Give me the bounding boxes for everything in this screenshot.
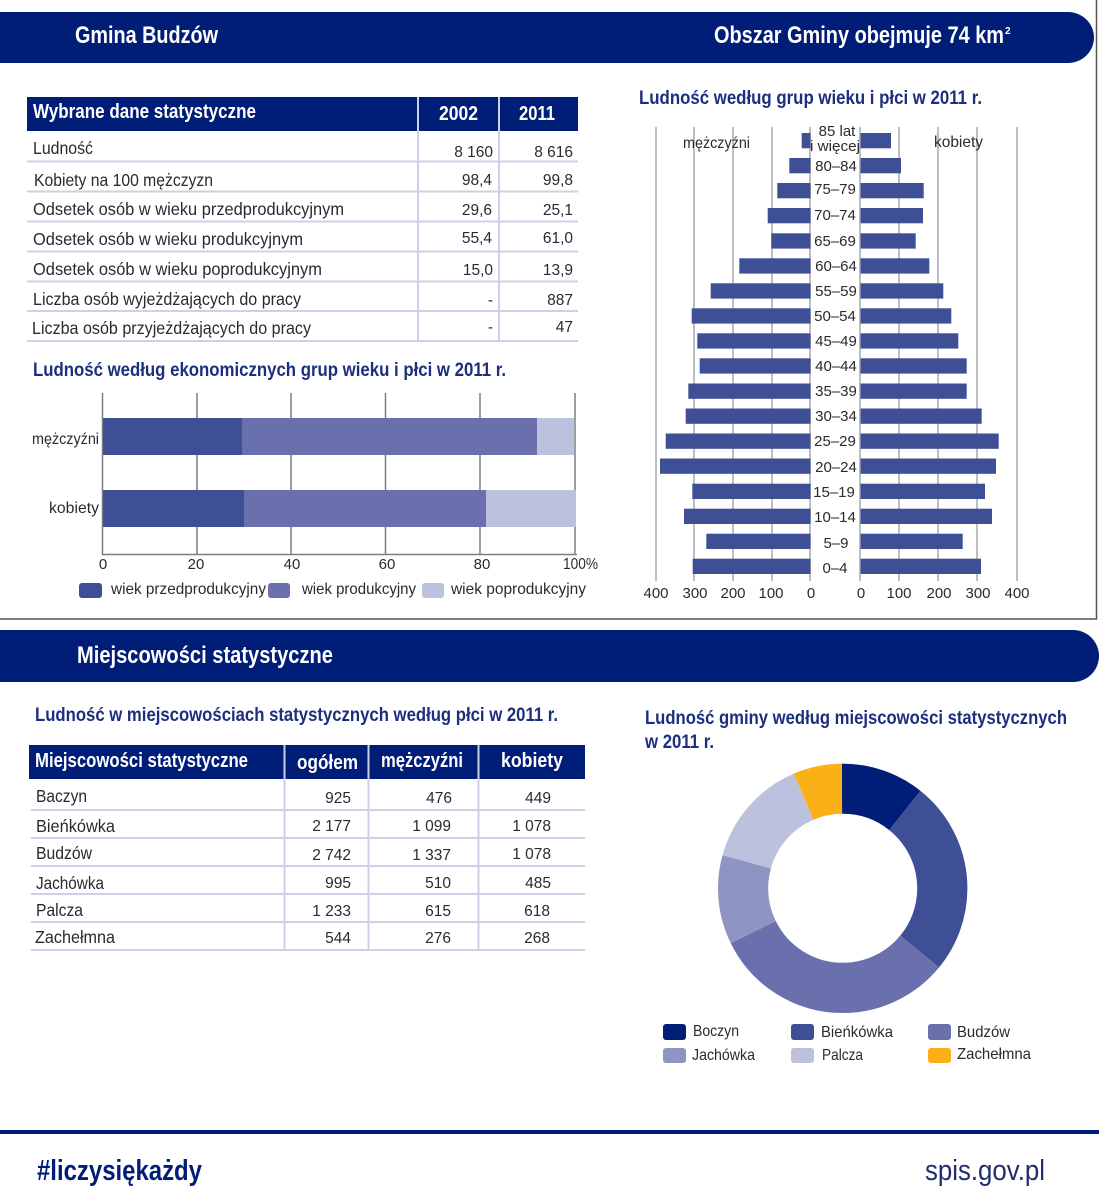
table: Miejscowości statystyczne: Zachełmna: [35, 927, 115, 947]
axis tick labels: [643, 585, 1030, 602]
axis tick labels: 400: [643, 585, 669, 602]
table: Miejscowości statystyczne: 449: [525, 790, 551, 807]
table: Miejscowości statystyczne: 1 078: [512, 818, 551, 835]
table: Wybrane dane statystyczne: 47: [556, 319, 573, 336]
legend: economic age groups: wiek produkcyjny: [301, 581, 416, 598]
stacked bar chart: economic age groups: 80: [474, 556, 490, 573]
header banner: Gmina Budzów: 2: [1005, 26, 1011, 37]
table: Wybrane dane statystyczne: [27, 97, 578, 341]
age labels: 65–69: [814, 233, 856, 250]
age labels: 75–79: [814, 181, 856, 198]
age labels: 10–14: [814, 509, 856, 526]
axis tick labels: 200: [926, 585, 952, 602]
table: Wybrane dane statystyczne: Liczba osób wyjeżdżających do pracy: [33, 289, 301, 309]
table: Wybrane dane statystyczne: 2002: [439, 103, 478, 125]
table: Wybrane dane statystyczne: 15,0: [463, 262, 493, 279]
axis tick labels: 200: [720, 585, 746, 602]
stacked bar chart: economic age groups: 100%: [563, 556, 598, 573]
table: Miejscowości statystyczne: 1 078: [512, 846, 551, 863]
population pyramid chart: [643, 123, 1030, 602]
heading: population pyramid: Ludność według grup wieku i płci w 2011 r.: [639, 88, 982, 109]
age labels: 5–9: [823, 535, 849, 552]
age labels: 30–34: [815, 408, 857, 425]
bar: mężczyźni: [103, 418, 574, 455]
table: Miejscowości statystyczne: 485: [525, 875, 551, 892]
age labels: 50–54: [814, 308, 856, 325]
table: Miejscowości statystyczne: ogółem: [297, 752, 358, 774]
legend: donut chart: Zachełmna: [957, 1046, 1031, 1063]
age labels: 70–74: [814, 207, 856, 224]
table: Miejscowości statystyczne: 1 099: [412, 818, 451, 835]
stacked bar chart: economic age groups: 40: [284, 556, 300, 573]
table: Miejscowości statystyczne: kobiety: [501, 750, 564, 772]
header banner: Gmina Budzów: Obszar Gminy obejmuje 74 km: [714, 22, 1004, 49]
table: Wybrane dane statystyczne: 13,9: [543, 262, 573, 279]
age labels: 80–84: [815, 158, 857, 175]
legend: donut chart: Bieńkówka: [821, 1024, 893, 1041]
axis tick labels: 300: [965, 585, 991, 602]
donut chart: population by locality: [743, 789, 942, 988]
table: Wybrane dane statystyczne: 55,4: [462, 230, 492, 247]
age labels: [810, 123, 860, 578]
stacked bar chart: economic age groups: 60: [379, 556, 395, 573]
table: Miejscowości statystyczne: Jachówka: [36, 873, 104, 893]
heading: economic age groups: Ludność według ekonomicznych grup wieku i płci w 2011 r.: [33, 360, 506, 381]
table: Wybrane dane statystyczne: -: [488, 292, 493, 309]
stacked bar chart: economic age groups: kobiety: [49, 500, 99, 517]
legend: donut chart: [663, 1023, 1031, 1064]
table: Miejscowości statystyczne: 268: [524, 930, 550, 947]
bars: kobiety: [860, 133, 999, 574]
table: Wybrane dane statystyczne: 61,0: [543, 230, 573, 247]
header banner: Miejscowości statystyczne: Miejscowości statystyczne: [77, 642, 333, 669]
table: Wybrane dane statystyczne: Odsetek osób w wieku poprodukcyjnym: [33, 259, 322, 279]
legend: economic age groups: wiek poprodukcyjny: [450, 581, 586, 598]
table: Miejscowości statystyczne: 1 337: [412, 847, 451, 864]
table: Miejscowości statystyczne: 995: [325, 875, 351, 892]
age labels: 20–24: [815, 459, 857, 476]
table: Wybrane dane statystyczne: 887: [547, 292, 573, 309]
stacked bar chart: economic age groups: [32, 393, 598, 573]
age labels: 35–39: [815, 383, 857, 400]
stacked bar chart: economic age groups: 20: [188, 556, 204, 573]
table: Wybrane dane statystyczne: 8 616: [534, 144, 573, 161]
header banner: Miejscowości statystyczne: [0, 630, 1099, 682]
axis tick labels: 100: [758, 585, 784, 602]
table: Miejscowości statystyczne: Bieńkówka: [36, 816, 115, 836]
age labels: 0–4: [822, 560, 848, 577]
heading: localities table: Ludność w miejscowościach statystycznych według płci w 2011 r.: [35, 705, 558, 726]
table: Miejscowości statystyczne: 510: [425, 875, 451, 892]
axis tick labels: 400: [1004, 585, 1030, 602]
table: Miejscowości statystyczne: 544: [325, 930, 351, 947]
header banner: Gmina Budzów: [0, 12, 1094, 63]
table: Wybrane dane statystyczne: Odsetek osób w wieku produkcyjnym: [33, 229, 303, 249]
frame of top section: [0, 0, 1096, 619]
table: Wybrane dane statystyczne: 29,6: [462, 202, 492, 219]
footer hashtag: #liczysiękażdy: [37, 1155, 202, 1187]
footer rule: [0, 1130, 1099, 1134]
table: Wybrane dane statystyczne: Kobiety na 100 mężczyzn: [34, 170, 213, 190]
heading: donut chart: w 2011 r.: [644, 732, 714, 753]
table: Miejscowości statystyczne: Palcza: [36, 900, 83, 920]
table: Wybrane dane statystyczne: Ludność: [33, 138, 93, 158]
table: Wybrane dane statystyczne: 99,8: [543, 172, 573, 189]
axis tick labels: 0: [857, 585, 865, 602]
table: Wybrane dane statystyczne: 25,1: [543, 202, 573, 219]
axis tick labels: 100: [886, 585, 912, 602]
table: Wybrane dane statystyczne: 98,4: [462, 172, 492, 189]
axis tick labels: 0: [807, 585, 815, 602]
table: Miejscowości statystyczne: 615: [425, 903, 451, 920]
table: Miejscowości statystyczne: Miejscowości statystyczne: [35, 750, 248, 772]
table: Miejscowości statystyczne: Baczyn: [36, 786, 87, 806]
table: Wybrane dane statystyczne: -: [488, 319, 493, 336]
table: Miejscowości statystyczne: 2 177: [312, 818, 351, 835]
age labels: 85 lat: [819, 123, 856, 140]
header banner: Gmina Budzów: Gmina Budzów: [75, 22, 218, 49]
table: Miejscowości statystyczne: [29, 745, 585, 950]
stacked bar chart: economic age groups: 0: [99, 556, 107, 573]
axis tick labels: 300: [682, 585, 708, 602]
table: Wybrane dane statystyczne: Liczba osób przyjeżdżających do pracy: [32, 318, 311, 338]
heading: donut chart: [644, 708, 1067, 753]
table: Miejscowości statystyczne: 276: [425, 930, 451, 947]
legend: economic age groups: wiek przedprodukcyjny: [110, 581, 266, 598]
population pyramid chart: mężczyźni: [683, 135, 750, 152]
age labels: 60–64: [815, 258, 857, 275]
age labels: 55–59: [815, 283, 857, 300]
bar: kobiety: [103, 490, 576, 527]
table: Wybrane dane statystyczne: 8 160: [454, 144, 493, 161]
table: Wybrane dane statystyczne: 2011: [519, 103, 555, 125]
bars: mężczyźni: [660, 133, 810, 574]
legend: donut chart: Palcza: [822, 1047, 863, 1064]
table: Miejscowości statystyczne: 476: [426, 790, 452, 807]
age labels: 15–19: [813, 484, 855, 501]
footer website: spis.gov.pl: [925, 1155, 1045, 1187]
table: Miejscowości statystyczne: 618: [524, 903, 550, 920]
age labels: 45–49: [815, 333, 857, 350]
legend: donut chart: Jachówka: [692, 1047, 755, 1064]
population pyramid chart: kobiety: [934, 134, 983, 151]
table: Wybrane dane statystyczne: Wybrane dane statystyczne: [33, 101, 256, 123]
table: Miejscowości statystyczne: 925: [325, 790, 351, 807]
table: Miejscowości statystyczne: mężczyźni: [381, 750, 463, 772]
legend: economic age groups: [79, 581, 586, 598]
age labels: i więcej: [810, 138, 860, 155]
table: Miejscowości statystyczne: Budzów: [36, 843, 92, 863]
table: Wybrane dane statystyczne: Odsetek osób w wieku przedprodukcyjnym: [33, 199, 344, 219]
table: Miejscowości statystyczne: 1 233: [312, 903, 351, 920]
table: Miejscowości statystyczne: 2 742: [312, 847, 351, 864]
legend: donut chart: Boczyn: [693, 1023, 739, 1040]
age labels: 25–29: [814, 433, 856, 450]
age labels: 40–44: [815, 358, 857, 375]
stacked bar chart: economic age groups: mężczyźni: [32, 431, 99, 448]
legend: donut chart: Budzów: [957, 1024, 1010, 1041]
